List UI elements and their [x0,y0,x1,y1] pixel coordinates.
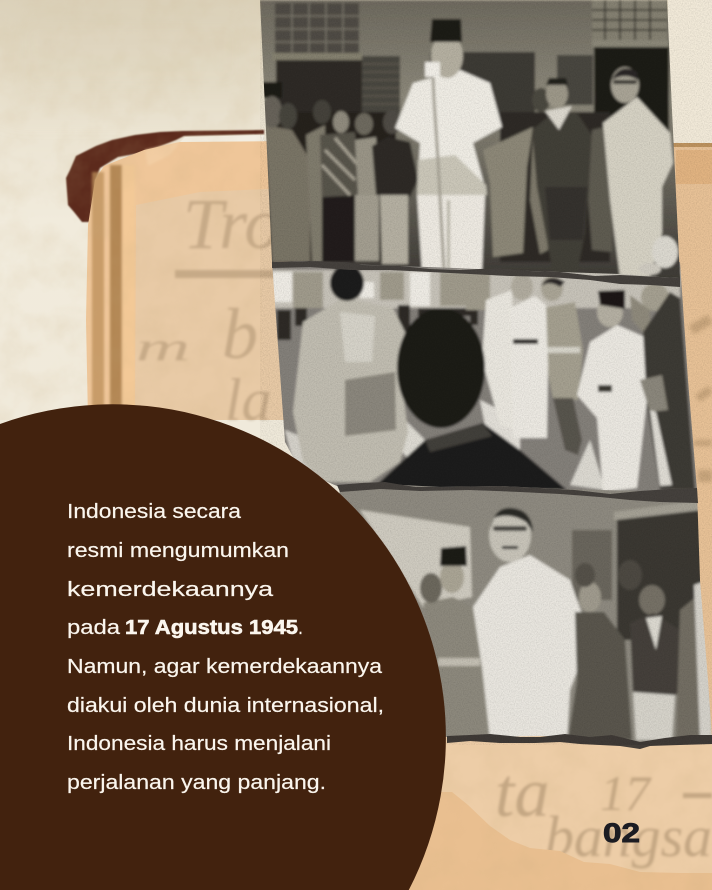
body text: Indonesia harus menjalani [67,732,331,755]
page number: 02 [603,818,640,848]
left man [422,596,458,608]
white suit man [473,555,590,740]
white ground patches [480,400,520,455]
background row [272,270,680,308]
microphone [425,62,440,77]
highlighted date line: pada [67,616,121,639]
cream gap above page [180,135,264,142]
crowd backdrop [266,112,396,262]
white figure behind [482,290,516,430]
body text: diakui oleh dunia internasional, [67,694,384,717]
photo 1 torn edge [272,261,680,287]
photo 2: crowd seen from behind [270,262,700,503]
dark suit man [532,113,592,262]
left window [275,3,359,53]
bottom paper with handwriting [400,735,712,890]
book spine stripes [92,142,180,420]
dark silhouette foreground [397,308,485,428]
right window [592,0,667,40]
flowers [652,236,678,268]
page base [86,141,290,420]
doors [276,60,362,122]
highlighted date line: . [298,616,303,639]
body text: Indonesia secara [67,500,242,523]
white jacket man [577,325,647,492]
man in back view [293,298,408,482]
bottom handwriting: bangsa [545,804,712,869]
paper texture lower [400,745,712,890]
body text: perjalanan yang panjang. [67,771,326,794]
torn brown book cover edge [66,130,264,222]
highlighted date line: 17 Agustus 1945 [125,616,298,639]
khaki man [483,127,533,257]
brown circle panel [0,404,446,890]
right tan strip [668,143,712,763]
poster [360,510,472,607]
page handwriting [136,184,280,433]
page handwriting: m [136,324,190,369]
film grain over photos [260,0,712,745]
page handwriting: b [222,294,258,374]
body text [67,500,384,794]
bottom handwriting [495,755,712,869]
torn darker paper [405,792,712,890]
photo 2 torn edge [337,482,698,503]
white uniform man [510,296,548,438]
page handwriting: Tro [183,184,280,264]
paper sheet on page [135,188,290,420]
right doorway [617,510,706,640]
photo 3 torn edge [447,734,712,749]
paper texture [0,0,262,420]
body text: Namun, agar kemerdekaannya [67,655,383,678]
khaki shorts man [543,302,583,400]
page handwriting: la [225,367,272,433]
right man in white suit [603,97,673,277]
right crowd [568,612,632,740]
man behind right [588,125,612,252]
bottom handwriting: ta [495,755,549,832]
central speaker [395,19,502,272]
photo 1: Soekarno reading the proclamation [258,0,682,287]
old book page with handwriting [86,135,290,433]
photo 3: Mohammad Hatta with crowd [330,480,712,749]
body text: resmi mengumumkan [67,539,289,562]
left crowd [265,125,310,262]
body text: kemerdekaannya [67,578,274,601]
far right men [641,283,669,311]
bottom handwriting: 17 [600,765,652,821]
